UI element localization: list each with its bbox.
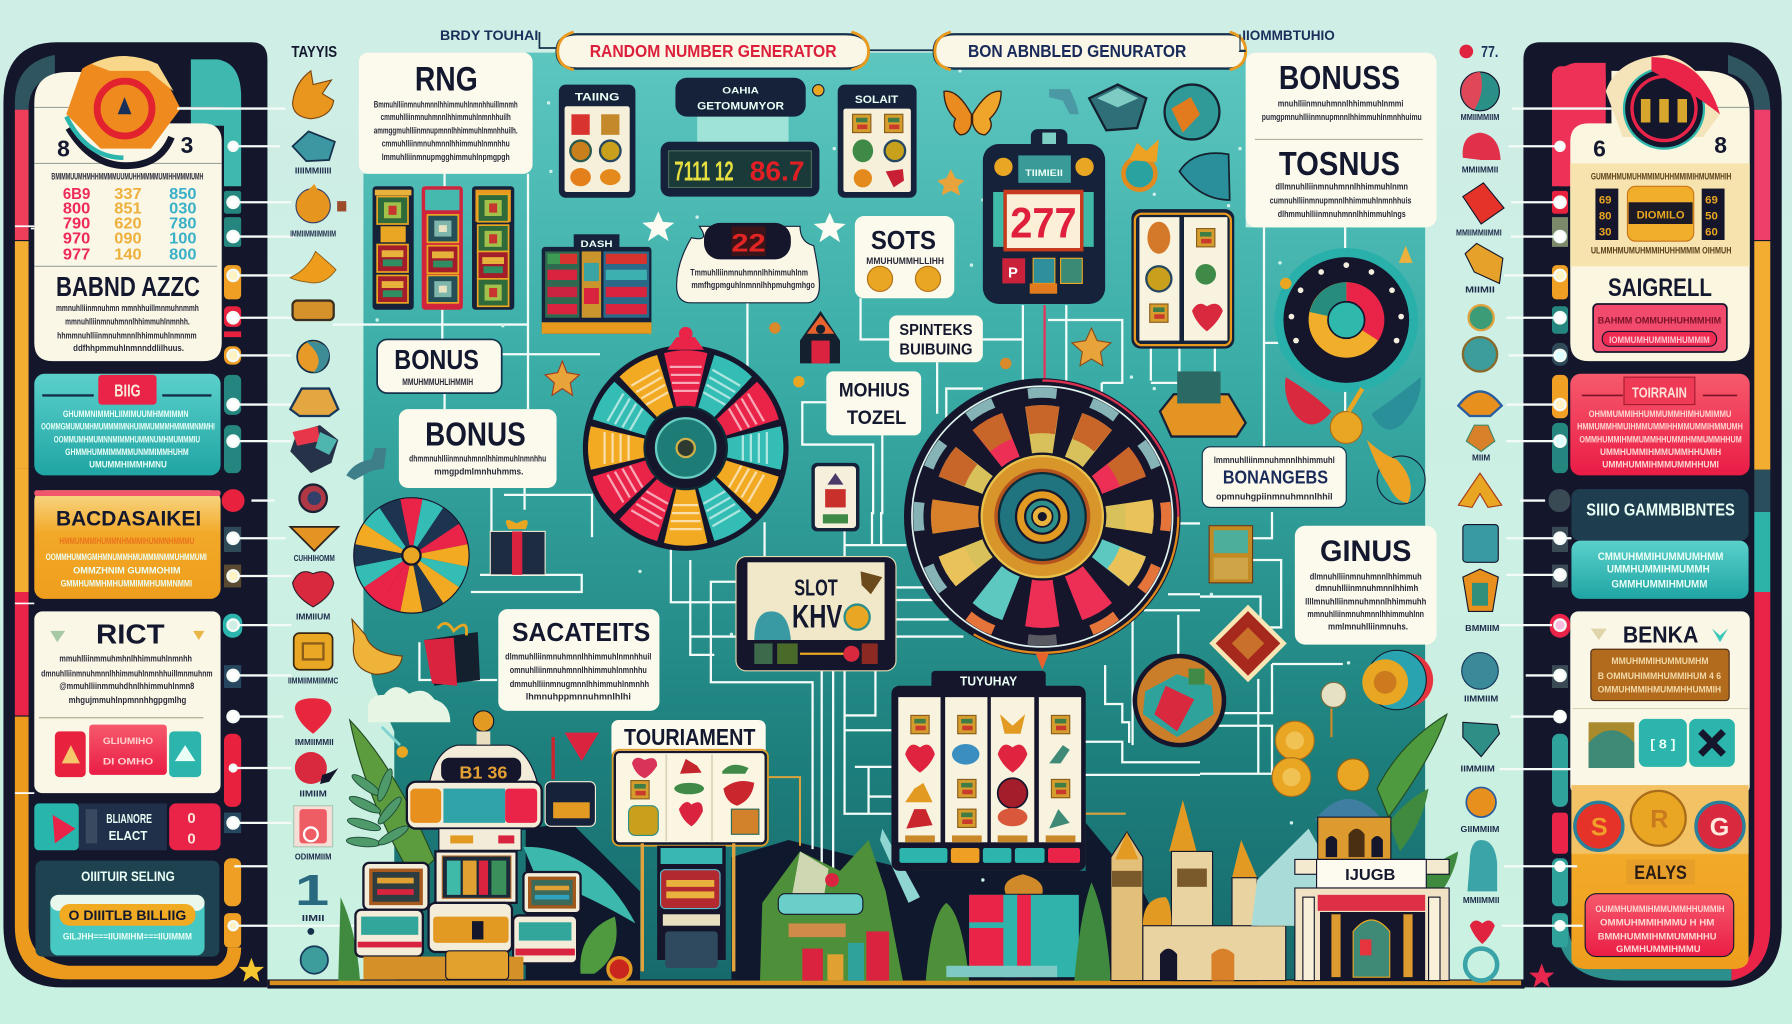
left dark panel <box>3 42 267 987</box>
panel: RNG text box: cmmuhlliinmnuhmnnlhhimmuhlnmnhhu <box>382 138 510 148</box>
label: lantern: MIIM <box>1472 454 1491 463</box>
score display: generator header and scoreboard: 7111 12 <box>674 156 734 187</box>
label: gold square: IIMMIIMMIIMMC <box>288 676 338 685</box>
board: TOURIAMENT: TOURIAMENT <box>624 724 755 750</box>
left card 4: cream RICT card: RICT <box>96 618 165 649</box>
right card 1: cream gold card: 50 <box>1705 210 1718 222</box>
board: TOURIAMENT <box>611 720 768 846</box>
panel: BONUS large label: BONUS <box>425 417 526 454</box>
icon: swirl <box>296 184 346 223</box>
panel: BONANGEBS: lmmnuhlliinmnuhmnnlhhimmuhl <box>1214 455 1335 465</box>
left row: play tile with label and red counter: 0 <box>187 831 196 847</box>
panel: SOTS: MMUHUMMHLLIHH <box>866 256 944 266</box>
icon: gift red <box>424 623 480 686</box>
panel: GINUS: GINUS <box>1320 535 1411 568</box>
left card 4: cream RICT card: mmuhlliinmmuhmhnlhhimmuhlnmnhh <box>59 654 192 664</box>
right card 2: red TOIRRAIN card: HMMUMMHMUIHMMUMMIHHMMUMMIHMMUMH <box>1577 422 1743 432</box>
label: swirl: IMMIIMMIIMMIIM <box>290 230 336 239</box>
right orange coin card: OMMUHMMIHMMU H HM <box>1600 918 1714 928</box>
left card 3: orange BACDASAIKEI card: OMMZHNIM GUMMOHIM <box>73 566 181 576</box>
icon: rainbow <box>1458 391 1502 416</box>
panel: BONUSS and TOSNUS: dlhmmuhlliinmnuhmnnlhhimmuhlngs <box>1278 209 1406 219</box>
left card 6: billing card: OIIITUIR SELING <box>81 869 175 884</box>
left card 1: cream numbers card: 140 <box>114 246 142 263</box>
left card 6: billing card: O DIIITLB BILLIIG <box>69 908 186 923</box>
mini card: TAIING: TAIING <box>575 92 620 104</box>
panel: RNG text box: cmmuhlliinmnuhmnnlhhimmuhlnmnhhuilh <box>381 112 511 122</box>
left card 1: cream numbers card: mmnuhlliinmnuhmn mmnhhuillmnmuhnmmh <box>56 303 199 313</box>
left row: play tile with label and red counter: 0 <box>187 811 196 827</box>
label: red cap: MMIIMMII <box>1462 166 1498 175</box>
mini card: SOLAIT <box>838 85 917 198</box>
icon: teal tile <box>1463 525 1498 562</box>
gold pair of tiles right <box>1209 526 1253 583</box>
left card 3: orange BACDASAIKEI card <box>34 490 221 599</box>
panel: RNG text box <box>359 53 533 174</box>
panel: BONUSS and TOSNUS: TOSNUS <box>1279 146 1400 183</box>
right orange coin card: GMMHUMMIHMMU <box>1616 944 1701 954</box>
panel: SACATEITS: SACATEITS <box>512 617 650 647</box>
right card 2: red TOIRRAIN card: OHMMUMMIHHUMMUMMHIMHUMIMMU <box>1589 409 1732 419</box>
panel: BONUS small label <box>377 339 502 393</box>
panel: BONUSS and TOSNUS: cumnuhlliinmnupmnnlhhimmuhlnmnhhuis <box>1270 195 1411 205</box>
gauge wheel <box>1274 248 1418 392</box>
label: numeral one: IIMII <box>302 914 325 923</box>
panel: SPINTEKS BUIBUING: SPINTEKS <box>899 322 973 339</box>
left connector leaders <box>177 109 357 930</box>
emblem: III <box>1637 92 1691 130</box>
panel: BONANGEBS <box>1202 447 1346 507</box>
left card 2: teal BIIG card <box>34 374 221 475</box>
emblem <box>1606 55 1720 149</box>
277 slot machine: 277 <box>1010 200 1077 247</box>
palm leaves right <box>1377 714 1458 981</box>
SLOT KHV tablet: SLOT <box>794 574 838 600</box>
icon: gem <box>293 131 335 161</box>
icon: dot <box>307 928 314 935</box>
right card 1: cream gold card: 69 <box>1705 194 1718 206</box>
icon: flame <box>293 71 334 119</box>
left card 1: cream numbers card: 620 <box>114 216 142 233</box>
icon: ring with star <box>1123 139 1159 190</box>
icon: red cap <box>1463 133 1501 160</box>
icon: gold ticket <box>1465 243 1503 283</box>
label: diamond: CUHHIHOMM <box>294 554 335 563</box>
panel: RNG text box: lmmuhlliinmnupmgghimmuhlnpmgpgh <box>382 152 510 162</box>
panel: MOHIUS TOZEL: TOZEL <box>847 407 906 429</box>
right teal card with dark heading <box>1571 489 1749 599</box>
right dark panel <box>1523 42 1782 987</box>
panel: BONUSS and TOSNUS: dllmnuhlliinmnuhmnnlhhimmuhlnmn <box>1275 182 1408 192</box>
label: amber drop: GIIMMIIM <box>1461 825 1500 834</box>
icon: bar <box>293 301 334 320</box>
left card 1: cream numbers card: ddfhhpmmuhlnmnnddlilhuus. <box>73 343 184 353</box>
panel: GINUS: llllmnuhlliinmnuhmnnlhhimmuhh <box>1305 597 1427 607</box>
right card 1: cream gold card: BAHMM OMMUHHUHMMHIM <box>1598 315 1721 325</box>
mini card: SOLAIT: SOLAIT <box>855 94 898 106</box>
icon: teal figure <box>1467 840 1497 891</box>
bottom-left machine bank <box>355 711 599 979</box>
panel: BONUSS and TOSNUS: pumgpmnuhlliinmnupmnnlhhimmuhlnmnhhuimu <box>1262 112 1422 122</box>
bottom-left machine bank: B1 36 <box>459 762 507 782</box>
left card 2: teal BIIG card: UMUMMHIMMHMNU <box>89 459 167 469</box>
right card 1: cream gold card: GUMMHMUMUHMMIMUHHMMIMIHMUMMHIH <box>1591 171 1731 181</box>
icon: amber drop <box>1466 787 1496 817</box>
left card 1: cream numbers card <box>34 56 222 361</box>
icon: teal cup <box>1463 569 1498 611</box>
icon: swirl ball <box>1463 337 1497 371</box>
icon: teal shield <box>1463 722 1499 757</box>
left card 2: teal BIIG card: GHMMHUMMIMMMMUNMMIMMHUHM <box>65 447 189 457</box>
left card 6: billing card: GILJHH===IIUIMIHM===IIUIMMM <box>63 931 192 941</box>
label: red card: ODIMMIIM <box>295 852 332 861</box>
icon: winged coin <box>1285 377 1421 443</box>
right orange coin card: BMMHUMMIHMMUMMHHU <box>1598 931 1717 941</box>
left card 2: teal BIIG card: GHUMMNIMMHLIIMIMUUMHMMIMMN <box>63 409 189 419</box>
header: small left label: BRDY TOUHAI <box>440 28 538 43</box>
left card 1: cream numbers card: 030 <box>169 201 197 218</box>
277 slot machine: P <box>1008 266 1018 282</box>
icon: red tilted card <box>1209 605 1287 682</box>
left row: play tile with label and red counter: BLIANORE <box>106 812 152 826</box>
SLOT machine centre <box>891 671 1086 871</box>
left card 1: cream numbers card: 790 <box>63 216 90 233</box>
callout: 22 display: 22 <box>731 229 766 257</box>
left card 1: cream numbers card: 851 <box>114 201 142 218</box>
score display: generator header and scoreboard: 86.7 <box>750 156 805 187</box>
label: split ball: MMIIMMIIM <box>1461 113 1500 122</box>
panel: GINUS: mmlmnuhlliinmnuhs. <box>1328 622 1408 632</box>
left card 1: cream numbers card: mmnuhlliinmnuhmnnlhhimmuhlnmnhh. <box>65 317 190 327</box>
central teal field <box>363 53 1425 981</box>
panel: SPINTEKS BUIBUING: BUIBUING <box>899 341 973 358</box>
header pill: random number generator <box>539 32 1246 70</box>
icon: teal loop <box>1465 949 1497 981</box>
left card 3: orange BACDASAIKEI card: HMMUNMMIHUMMNHMMMIHUMMNHMMMU <box>59 536 195 546</box>
sparkle dots on teal field <box>375 69 1350 882</box>
icon: fan <box>290 251 336 283</box>
palm leaves left <box>338 720 635 981</box>
panel: SACATEITS: omnuhlliinmnuhmnnlhhimmuhlnmnhhu <box>510 665 647 675</box>
panel: SOTS <box>855 216 954 298</box>
panel: BONUS large label: mmgpdmlmnhuhmms. <box>434 466 523 476</box>
icon: chip wheel <box>1133 654 1226 747</box>
icon: silver coin with pin <box>1321 682 1346 737</box>
callout: 22 display: Tmmuhlliinmnuhmnnlhhimmuhlnm <box>690 267 808 277</box>
left card 1: cream numbers card: 780 <box>169 216 197 233</box>
panel: GINUS: mmnuhlliinmnuhmnnlhhimmuhlnn <box>1307 609 1424 619</box>
icon: globe <box>297 341 329 373</box>
left card 4: cream RICT card: DI OMHO <box>103 757 153 767</box>
column title: TAYYIS <box>291 44 337 61</box>
panel: SACATEITS: lhmnuhppmnnuhmnlhlhi <box>526 691 631 701</box>
icon: butterfly <box>944 91 1001 135</box>
right card: BENKA: OMMUHMMIHMUMMHHUMMIH <box>1598 685 1721 695</box>
palace building: IJUGB <box>1345 867 1395 884</box>
icon: box <box>290 425 338 473</box>
coloured spin wheel <box>583 327 789 551</box>
label: red swirl: IIMIIM <box>299 790 327 799</box>
right teal card with dark heading: CMMUHMMIHUMMUMHMM <box>1598 551 1723 563</box>
277 slot machine <box>983 129 1105 304</box>
label: gem: IIIIMMIIIII <box>295 167 331 176</box>
left card 3: orange BACDASAIKEI card: BACDASAIKEI <box>56 506 201 531</box>
right card: BENKA: B OMMUHIMMHUMMIHUM 4 6 <box>1598 671 1721 681</box>
icon: gold square <box>294 633 333 670</box>
column title: 77. <box>1481 44 1498 61</box>
icon: red card <box>294 806 333 847</box>
icon: crystal cube <box>1089 85 1146 130</box>
right card 2: red TOIRRAIN card: OMMHUMMIHMMUMMHHUMMIHMMUMMHHUM <box>1579 434 1742 444</box>
palace building <box>1295 759 1449 981</box>
label: teal swirl: IIMMIIM <box>1464 695 1499 704</box>
277 slot machine: TIIMIEII <box>1025 168 1063 178</box>
right card 1: cream gold card: ULMMHMUMUHMMIHUHHMMIM OIHMUH <box>1591 246 1731 256</box>
column title marker <box>1459 45 1473 58</box>
left card 4: cream RICT card: @mmuhlliinmmuhdhnlhhimmuhlnmn8 <box>59 681 194 691</box>
panel: SPINTEKS BUIBUING <box>889 315 983 362</box>
reel card right of machine <box>1131 209 1234 349</box>
panel: GINUS <box>1295 526 1437 645</box>
icon: striped shell <box>1179 153 1230 200</box>
right orange coin card: G <box>1710 813 1729 841</box>
right card 2: red TOIRRAIN card: UMMHUMMIHMMUMMHHUMIH <box>1600 447 1721 457</box>
left card 1: cream numbers card: hhmmnuhlliinmnuhmnnlhhimmuhlnmnmm <box>57 330 197 340</box>
panel: RNG text box: Bmmuhlliinmnuhmnnlhhimmuhlnmnhhuillmnmh <box>374 99 518 109</box>
SLOT KHV tablet <box>736 557 896 671</box>
label: gold ticket: MIIMII <box>1465 286 1495 295</box>
right card 1: cream gold card: 30 <box>1599 226 1612 238</box>
icon: split ball <box>1461 72 1499 111</box>
label: teal cup: BMMIIM <box>1465 624 1500 633</box>
icon: gold pretzel <box>1458 473 1502 507</box>
green tree centre <box>926 903 969 981</box>
icon: teal swirl <box>1462 653 1498 689</box>
panel: SACATEITS <box>498 609 659 711</box>
panel: BONUS large label <box>399 409 557 488</box>
gold star left <box>239 958 264 982</box>
right card 1: cream gold card: IOMMUMHUMMIMHUMMIM <box>1609 335 1710 345</box>
right card 2: red TOIRRAIN card: UMMHUMMIHMMUMMHHUMI <box>1602 459 1719 469</box>
label: teal figure: MMIIMMII <box>1463 896 1499 905</box>
left card 1: cream numbers card: BMIMMUUMHMHHMMMMUUMUHHMMMMUMIHHMMMIUMH <box>51 171 203 181</box>
left card 3: orange BACDASAIKEI card: GMMHUMMHMHUMMIMMHUMMNMMI <box>61 578 192 588</box>
panel: GINUS: dmnuhlliinmnuhmnnlhhimh <box>1315 583 1419 593</box>
header pill: bon abnbled genurator <box>934 32 1246 70</box>
left card 1: cream numbers card: 337 <box>114 186 142 203</box>
small card with icons <box>811 463 859 531</box>
stars on teal <box>545 169 1413 395</box>
left card 6: billing card <box>35 861 219 957</box>
right icon column <box>1456 44 1504 981</box>
left card 1: cream numbers card: 850 <box>169 186 197 203</box>
icon: gift near wheel <box>490 520 545 575</box>
red star right <box>1529 963 1554 987</box>
right card 1: cream gold card: 69 <box>1599 194 1612 206</box>
right card: BENKA <box>1570 611 1750 794</box>
right orange coin card: S <box>1591 813 1608 841</box>
SLOT KHV tablet: KHV <box>792 598 843 634</box>
left card 1: cream numbers card: 970 <box>63 230 90 247</box>
big photo wheel <box>904 378 1181 670</box>
icon: key hook <box>1049 89 1079 114</box>
right teal card with dark heading: GMMHUMMIHMUMM <box>1611 578 1707 590</box>
left card 1: cream numbers card: 8 <box>57 136 70 162</box>
board: DASH: DASH <box>581 239 613 249</box>
left card 3: orange BACDASAIKEI card: OOMMHUMMGMHMNUMMHMUMMMNMMUHMMUMI <box>46 552 207 562</box>
callout: 22 display <box>677 223 819 303</box>
left card 1: cream numbers card: 800 <box>169 246 197 263</box>
left card 4: cream RICT card: mhgujmmuhlnpmnnhhgpgmlhg <box>69 695 186 705</box>
left outer colour strip <box>15 55 241 979</box>
right card 1: cream gold card: DIOMILO <box>1637 209 1685 221</box>
right orange coin card: EALYS <box>1634 862 1687 884</box>
right orange coin card: R <box>1650 805 1668 833</box>
left row: play tile with label and red counter: ELACT <box>109 829 148 843</box>
icon: orange robot <box>800 311 840 363</box>
icon: coins pair <box>1272 721 1314 797</box>
left card 2: teal BIIG card: BIIG <box>114 381 141 401</box>
left card 4: cream RICT card: dmnuhlliinmnuhmnnlhhimmuhlnmnhhuillmnmuhnm <box>41 669 213 679</box>
left side buttons <box>191 59 245 947</box>
right teal card with dark heading: UMMHUMMIHMUMMH <box>1607 564 1710 576</box>
panel: BONUSS and TOSNUS <box>1246 53 1437 227</box>
panel: SACATEITS: dmmuhlliinmnugmnnlhhimmuhlnmnhh <box>510 679 649 689</box>
label: heart: IMMIIUM <box>296 612 331 621</box>
right outer colour strip <box>1557 55 1770 981</box>
right orange coin card: OUMMHUMMIHMMUMMHHUMMIH <box>1595 904 1725 914</box>
right card 1: cream gold card: 6 <box>1593 136 1606 162</box>
right card: BENKA: BENKA <box>1623 621 1698 647</box>
icon: red drop <box>295 698 331 734</box>
left icon column <box>288 44 346 974</box>
icon: globe right <box>1165 85 1219 139</box>
panel: BONUSS and TOSNUS: BONUSS <box>1279 60 1400 97</box>
right card 1: cream gold card: 60 <box>1705 226 1718 238</box>
left card 2: teal BIIG card: OOMMUMHMUMNNMIMMHUMMNUMHMUMMMIU <box>54 434 200 444</box>
icon: banana horn <box>352 619 402 674</box>
panel: BONUS large label: dhmmnuhlliinmnuhmnnlhhimmuhlnmnhhu <box>409 454 546 464</box>
panel: BONANGEBS: opmnuhgpiinmnuhmnnlhhil <box>1216 491 1333 501</box>
icon: tag kite <box>1463 183 1504 224</box>
icon: lantern <box>1466 425 1495 451</box>
bottom gold rule <box>267 979 1525 989</box>
panel: BONUSS and TOSNUS: mnuhlliinmnuhmnnlhhimmuhlnmmi <box>1278 98 1403 108</box>
left card 1: cream numbers card: 977 <box>63 246 90 263</box>
panel: RNG text box: ammggmuhlliinmnupmnnlhhimmuhlnmnhhuilh. <box>374 126 518 136</box>
panel: SOTS: SOTS <box>871 225 936 255</box>
panel: BONUS small label: BONUS <box>394 344 479 375</box>
left card 1: cream numbers card: 6B9 <box>63 186 90 203</box>
right card 2: red TOIRRAIN card: TOIRRAIN <box>1632 386 1687 402</box>
icon: lens <box>299 485 327 512</box>
icon: tray <box>290 389 338 416</box>
right orange coin card <box>1571 785 1749 969</box>
panel: RNG text box: RNG <box>415 60 478 98</box>
left card 1: cream numbers card: 100 <box>169 230 197 247</box>
gift box bottom <box>946 874 1111 981</box>
small gold accents <box>769 85 1011 387</box>
panel: MOHIUS TOZEL <box>826 371 921 435</box>
emblem <box>66 56 181 166</box>
left card 4: cream RICT card: GLIUMIHO <box>103 736 153 746</box>
header pill: bon abnbled genurator: BON ABNBLED GENURATOR <box>968 41 1187 61</box>
left card 1: cream numbers card: 090 <box>114 230 142 247</box>
right card 2: red TOIRRAIN card <box>1570 374 1750 475</box>
right card 1: cream gold card: 8 <box>1714 132 1727 158</box>
right teal card with dark heading: SIIIO GAMMBIBNTES <box>1586 499 1735 519</box>
icon: green ring <box>1469 305 1494 330</box>
right card: BENKA: MMUHMMIHUMMUMHM <box>1611 656 1709 666</box>
label: teal shield: IIMMIIM <box>1461 764 1495 773</box>
panel: MOHIUS TOZEL: MOHIUS <box>839 380 910 402</box>
callout: 22 display: mmfhgpmguhlnmnnlhhpmuhgmhgo <box>691 280 815 290</box>
right card 1: cream gold card: 80 <box>1599 210 1612 222</box>
right card: BENKA: [ 8 ] <box>1650 738 1675 752</box>
left card 1: cream numbers card: BABND AZZC <box>56 271 200 302</box>
mini card: TAIING <box>559 85 635 198</box>
reel strips under RNG <box>373 186 514 310</box>
temple towers <box>1111 800 1331 981</box>
icon: coin stack right <box>1362 650 1433 710</box>
icon: gold tiara car <box>1160 371 1246 437</box>
tower screen below board <box>608 843 734 981</box>
icon: heart <box>1470 920 1495 944</box>
icon: teal circle <box>301 946 328 974</box>
board: DASH <box>542 234 651 334</box>
left card 1: cream numbers card: 800 <box>63 201 90 218</box>
left card 1: cream numbers card: 3 <box>181 132 193 158</box>
right card 1: cream gold card <box>1570 55 1750 361</box>
icon: spoon key <box>382 727 408 758</box>
panel: SACATEITS: dlmmuhlliinmnuhmnnlhhimmuhlnmnhhuil <box>505 651 651 661</box>
label: tag kite: MMIIMMIIMMI <box>1456 228 1502 237</box>
cloud <box>368 687 450 722</box>
score display: generator header and scoreboard <box>661 78 819 197</box>
right connector leaders <box>1499 109 1611 930</box>
icon: red swirl <box>295 752 338 784</box>
icon: numeral one: 1 <box>295 867 329 915</box>
right card 1: cream gold card: SAIGRELL <box>1608 274 1712 302</box>
icon: globe with wing <box>1367 440 1425 504</box>
left card 4: cream RICT card <box>34 611 221 793</box>
icon: heart <box>293 572 334 607</box>
panel: GINUS: dlmnuhlliinmnuhmnnlhhimmuh <box>1310 571 1422 581</box>
right side buttons <box>1549 63 1606 947</box>
dark lower scene backdrop <box>526 823 1189 981</box>
header pill: random number generator: RANDOM NUMBER GENERATOR <box>590 41 837 61</box>
header: small right label: IIOMMBTUHIO <box>1242 28 1335 43</box>
left row: play tile with label and red counter <box>34 803 221 850</box>
icon: tap <box>346 448 386 480</box>
small wheel <box>353 497 470 614</box>
icon: diamond <box>290 527 338 551</box>
circuit connector lines <box>333 174 1345 872</box>
panel: BONANGEBS: BONANGEBS <box>1223 466 1328 487</box>
score display: generator header and scoreboard: GETOMUMYOR <box>697 101 784 113</box>
SLOT machine centre: TUYUHAY <box>960 675 1018 689</box>
left card 2: teal BIIG card: OOMMGMUMUMHMUMMMIMNHUIMMUMMMHMMMMNMMHI <box>41 422 215 432</box>
green hill with console <box>760 829 920 981</box>
panel: BONUS small label: MMUHMMUHLIHMMIH <box>402 377 473 387</box>
label: red drop: IMMIIMMII <box>295 738 334 747</box>
score display: generator header and scoreboard: OAHIA <box>722 86 759 96</box>
